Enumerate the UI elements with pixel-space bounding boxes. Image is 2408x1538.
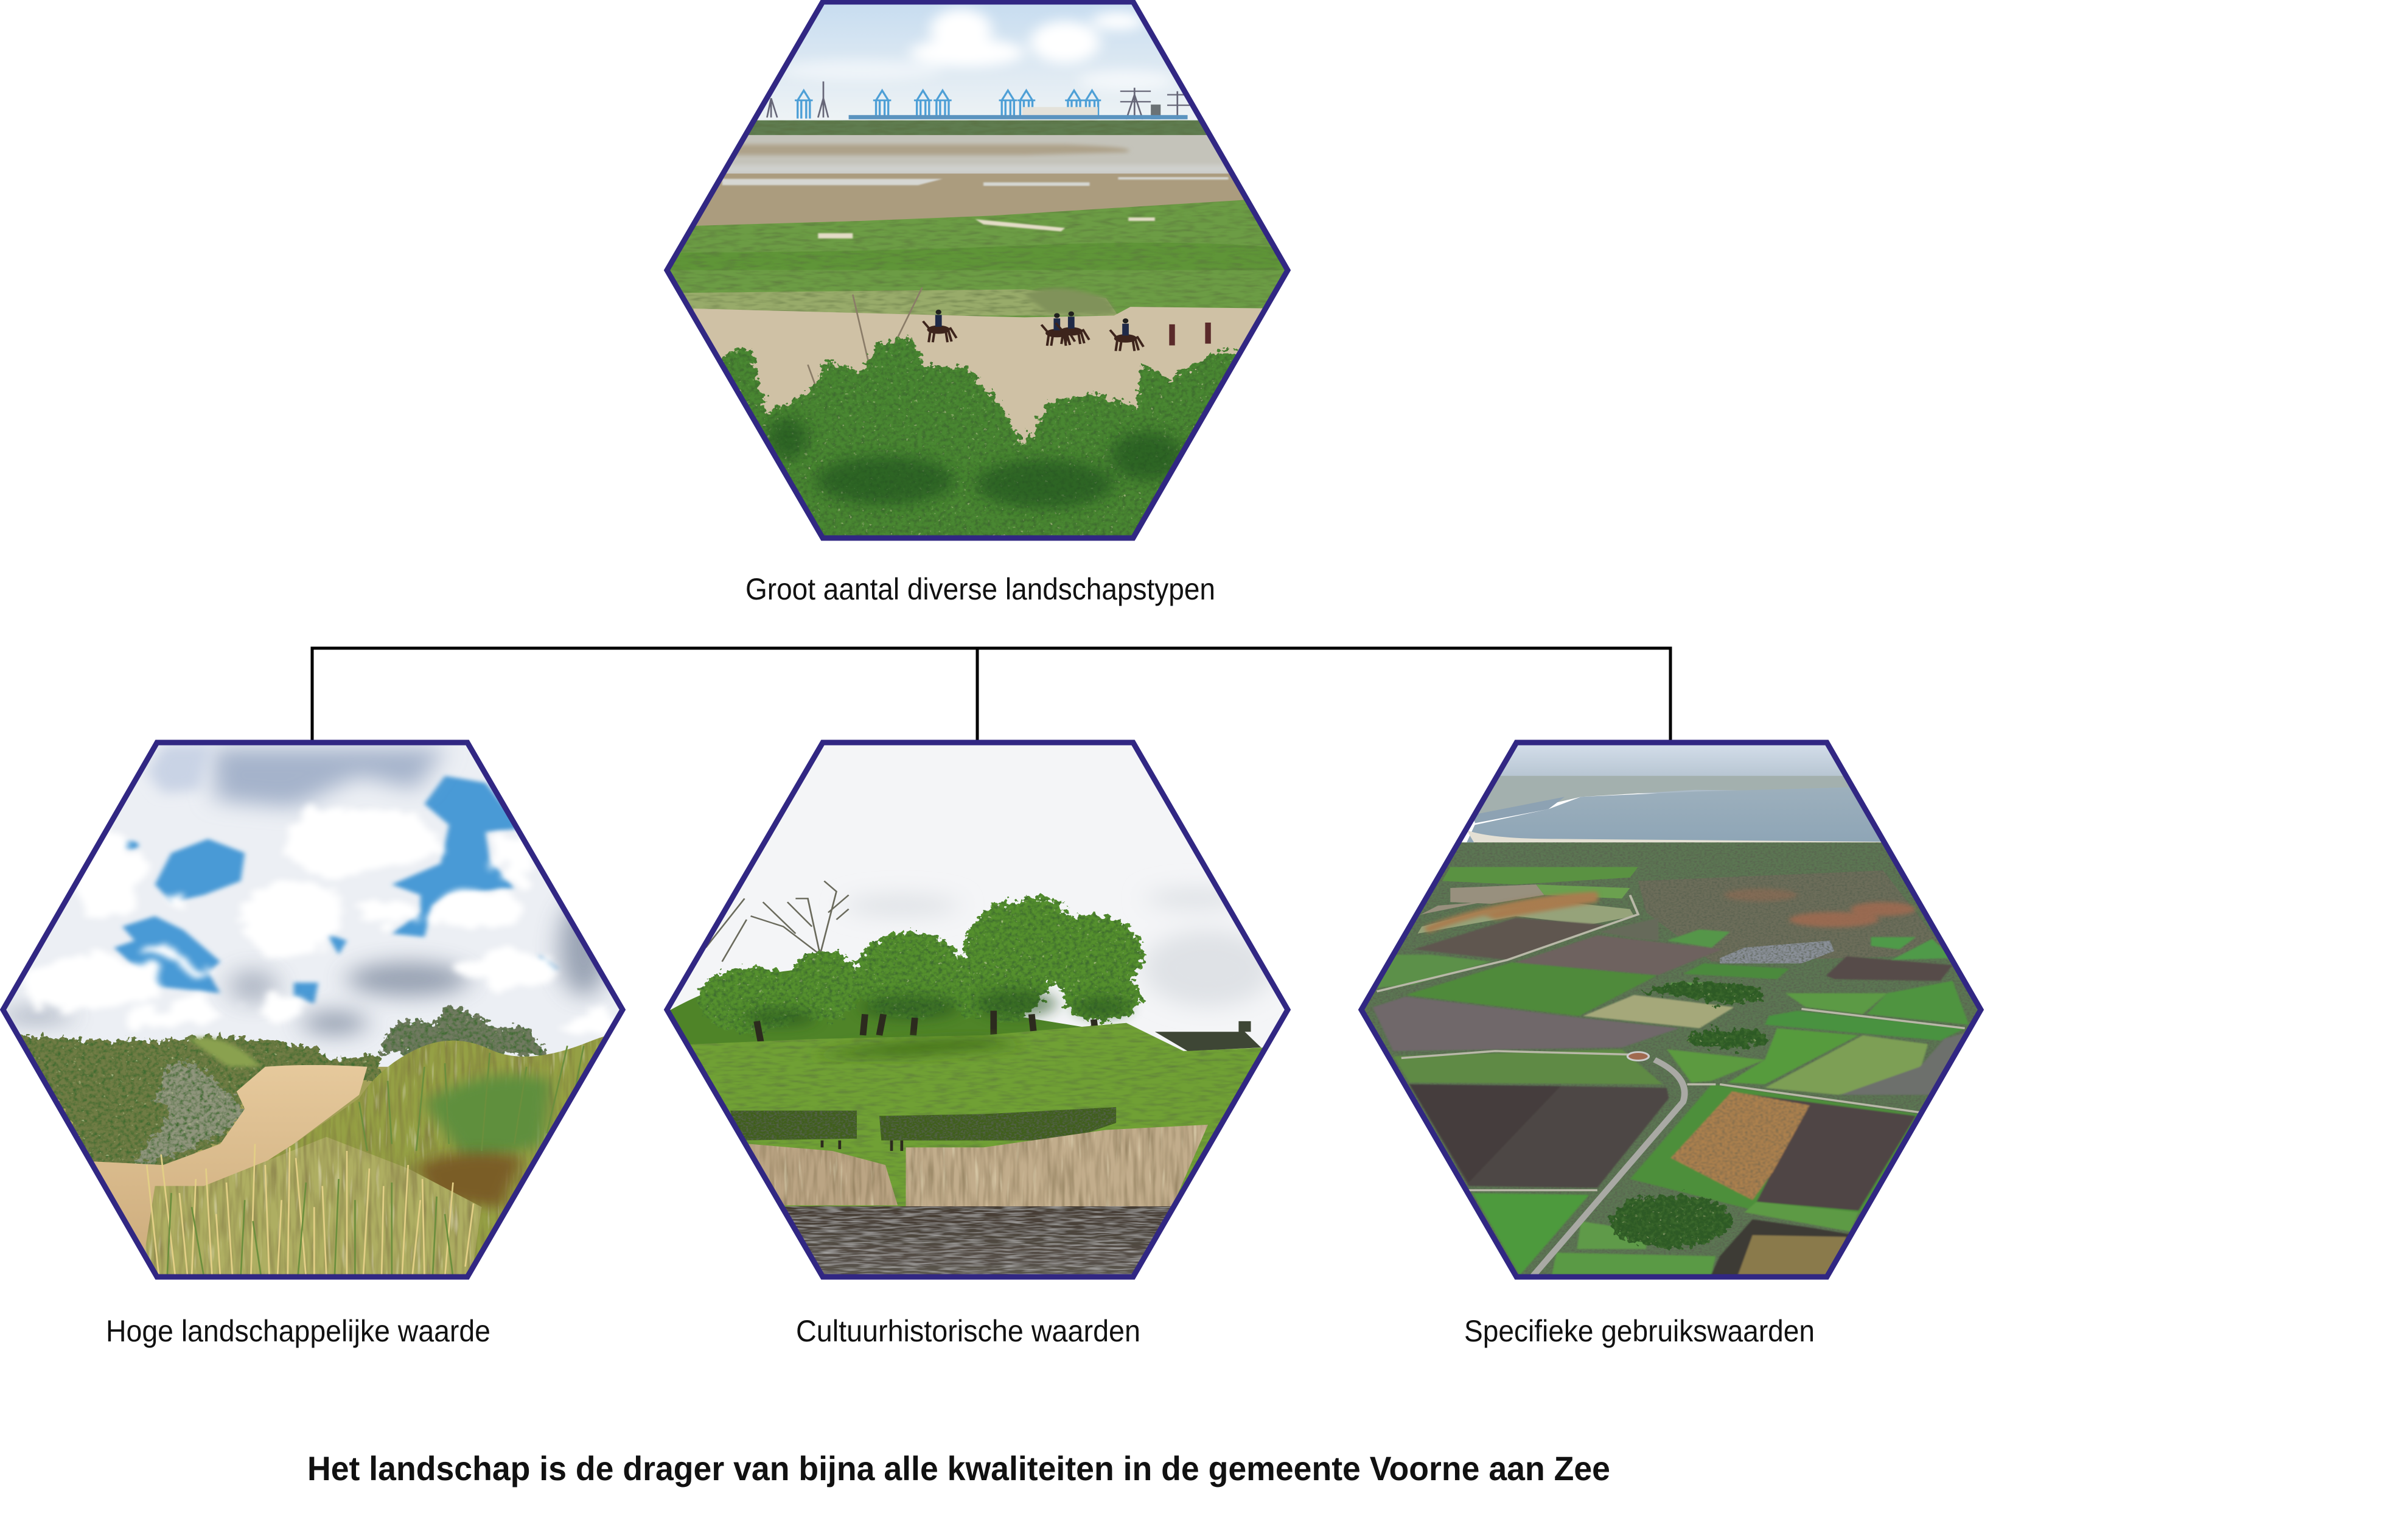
caption: Specifieke gebruikswaarden bbox=[1464, 1314, 1815, 1348]
panel: cultuurhistorische waarden bbox=[657, 730, 1310, 1348]
hedges bbox=[730, 1111, 857, 1141]
caption: Cultuurhistorische waarden bbox=[796, 1314, 1140, 1348]
grey cloud masses bbox=[212, 748, 445, 808]
grey-green tree bbox=[380, 1005, 547, 1057]
blue sky patches bbox=[114, 776, 559, 1004]
beach sand bbox=[694, 307, 1263, 446]
sky base bbox=[0, 730, 653, 1074]
land base bbox=[1352, 842, 2006, 1298]
photo: aerial view of polder and town bbox=[1352, 730, 2006, 1298]
photo: dunes under cloudy sky bbox=[0, 730, 653, 1302]
caption: Hoge landschappelijke waarde bbox=[106, 1314, 490, 1348]
hexagon frame bbox=[667, 743, 1288, 1277]
hill behind bbox=[669, 968, 1155, 1063]
brown fields and green fields bbox=[1373, 918, 1983, 1291]
marram grass right bbox=[184, 1033, 626, 1302]
left vegetation bbox=[0, 1032, 380, 1172]
water bbox=[657, 1206, 1310, 1290]
caption: Groot aantal diverse landschapstypen bbox=[745, 572, 1215, 606]
hexagon frame bbox=[1361, 743, 1981, 1277]
upper left fields bbox=[1442, 867, 1638, 884]
photo: fort with trees and reeds bbox=[657, 730, 1310, 1291]
bush shadows bbox=[767, 418, 1184, 508]
sand path bbox=[94, 1065, 368, 1291]
tree trunks bbox=[757, 1011, 1097, 1042]
salt marsh bbox=[670, 200, 1285, 318]
bare trees bbox=[706, 881, 849, 1011]
photo: beach with horses and port bbox=[670, 5, 1285, 536]
sea bbox=[1467, 786, 1883, 842]
panel: specifieke gebruikswaarden bbox=[1352, 730, 2006, 1348]
far land bbox=[1352, 776, 2006, 822]
far shore bbox=[749, 121, 1207, 135]
grass foreground bbox=[139, 1137, 481, 1291]
grass blades bbox=[147, 1144, 473, 1277]
mudflat bbox=[727, 135, 1229, 174]
beach line bbox=[1467, 830, 1883, 844]
sky bbox=[757, 5, 1198, 121]
hexagon frame bbox=[667, 2, 1288, 538]
clouds bbox=[780, 9, 1175, 91]
horses and walkers bbox=[923, 310, 1208, 351]
grass slope bbox=[657, 1023, 1265, 1291]
hexagon frame bbox=[3, 743, 623, 1277]
crown shadows bbox=[742, 990, 1131, 1027]
bunker bbox=[1155, 1021, 1261, 1051]
roundabout bbox=[1627, 1052, 1649, 1060]
tree avenue bbox=[1426, 895, 1597, 930]
panel: hoge landschappelijke waarde bbox=[0, 730, 653, 1348]
conclusion heading: Het landschap is de drager van bijna alle kwaliteiten in de gemeente Voorne aan Zee bbox=[307, 1449, 1610, 1487]
reeds bbox=[749, 1144, 898, 1205]
hazy sky bbox=[1352, 730, 2006, 794]
tree crowns bbox=[697, 897, 1143, 1033]
silver shrub bbox=[134, 1063, 246, 1165]
ground base bbox=[0, 1067, 653, 1291]
port cranes bbox=[767, 82, 1190, 120]
panel: groot aantal diverse landschapstypen bbox=[657, 0, 1310, 606]
bushes bbox=[706, 337, 1269, 561]
roads bbox=[1377, 895, 1965, 1190]
connector lines bbox=[312, 648, 1670, 743]
tree clusters bbox=[1610, 982, 1769, 1247]
town bbox=[1638, 870, 1949, 962]
wet sand bbox=[696, 173, 1244, 226]
bright cloud tops bbox=[16, 808, 616, 1035]
sky bbox=[657, 730, 1310, 1057]
bare twigs bbox=[808, 287, 922, 421]
